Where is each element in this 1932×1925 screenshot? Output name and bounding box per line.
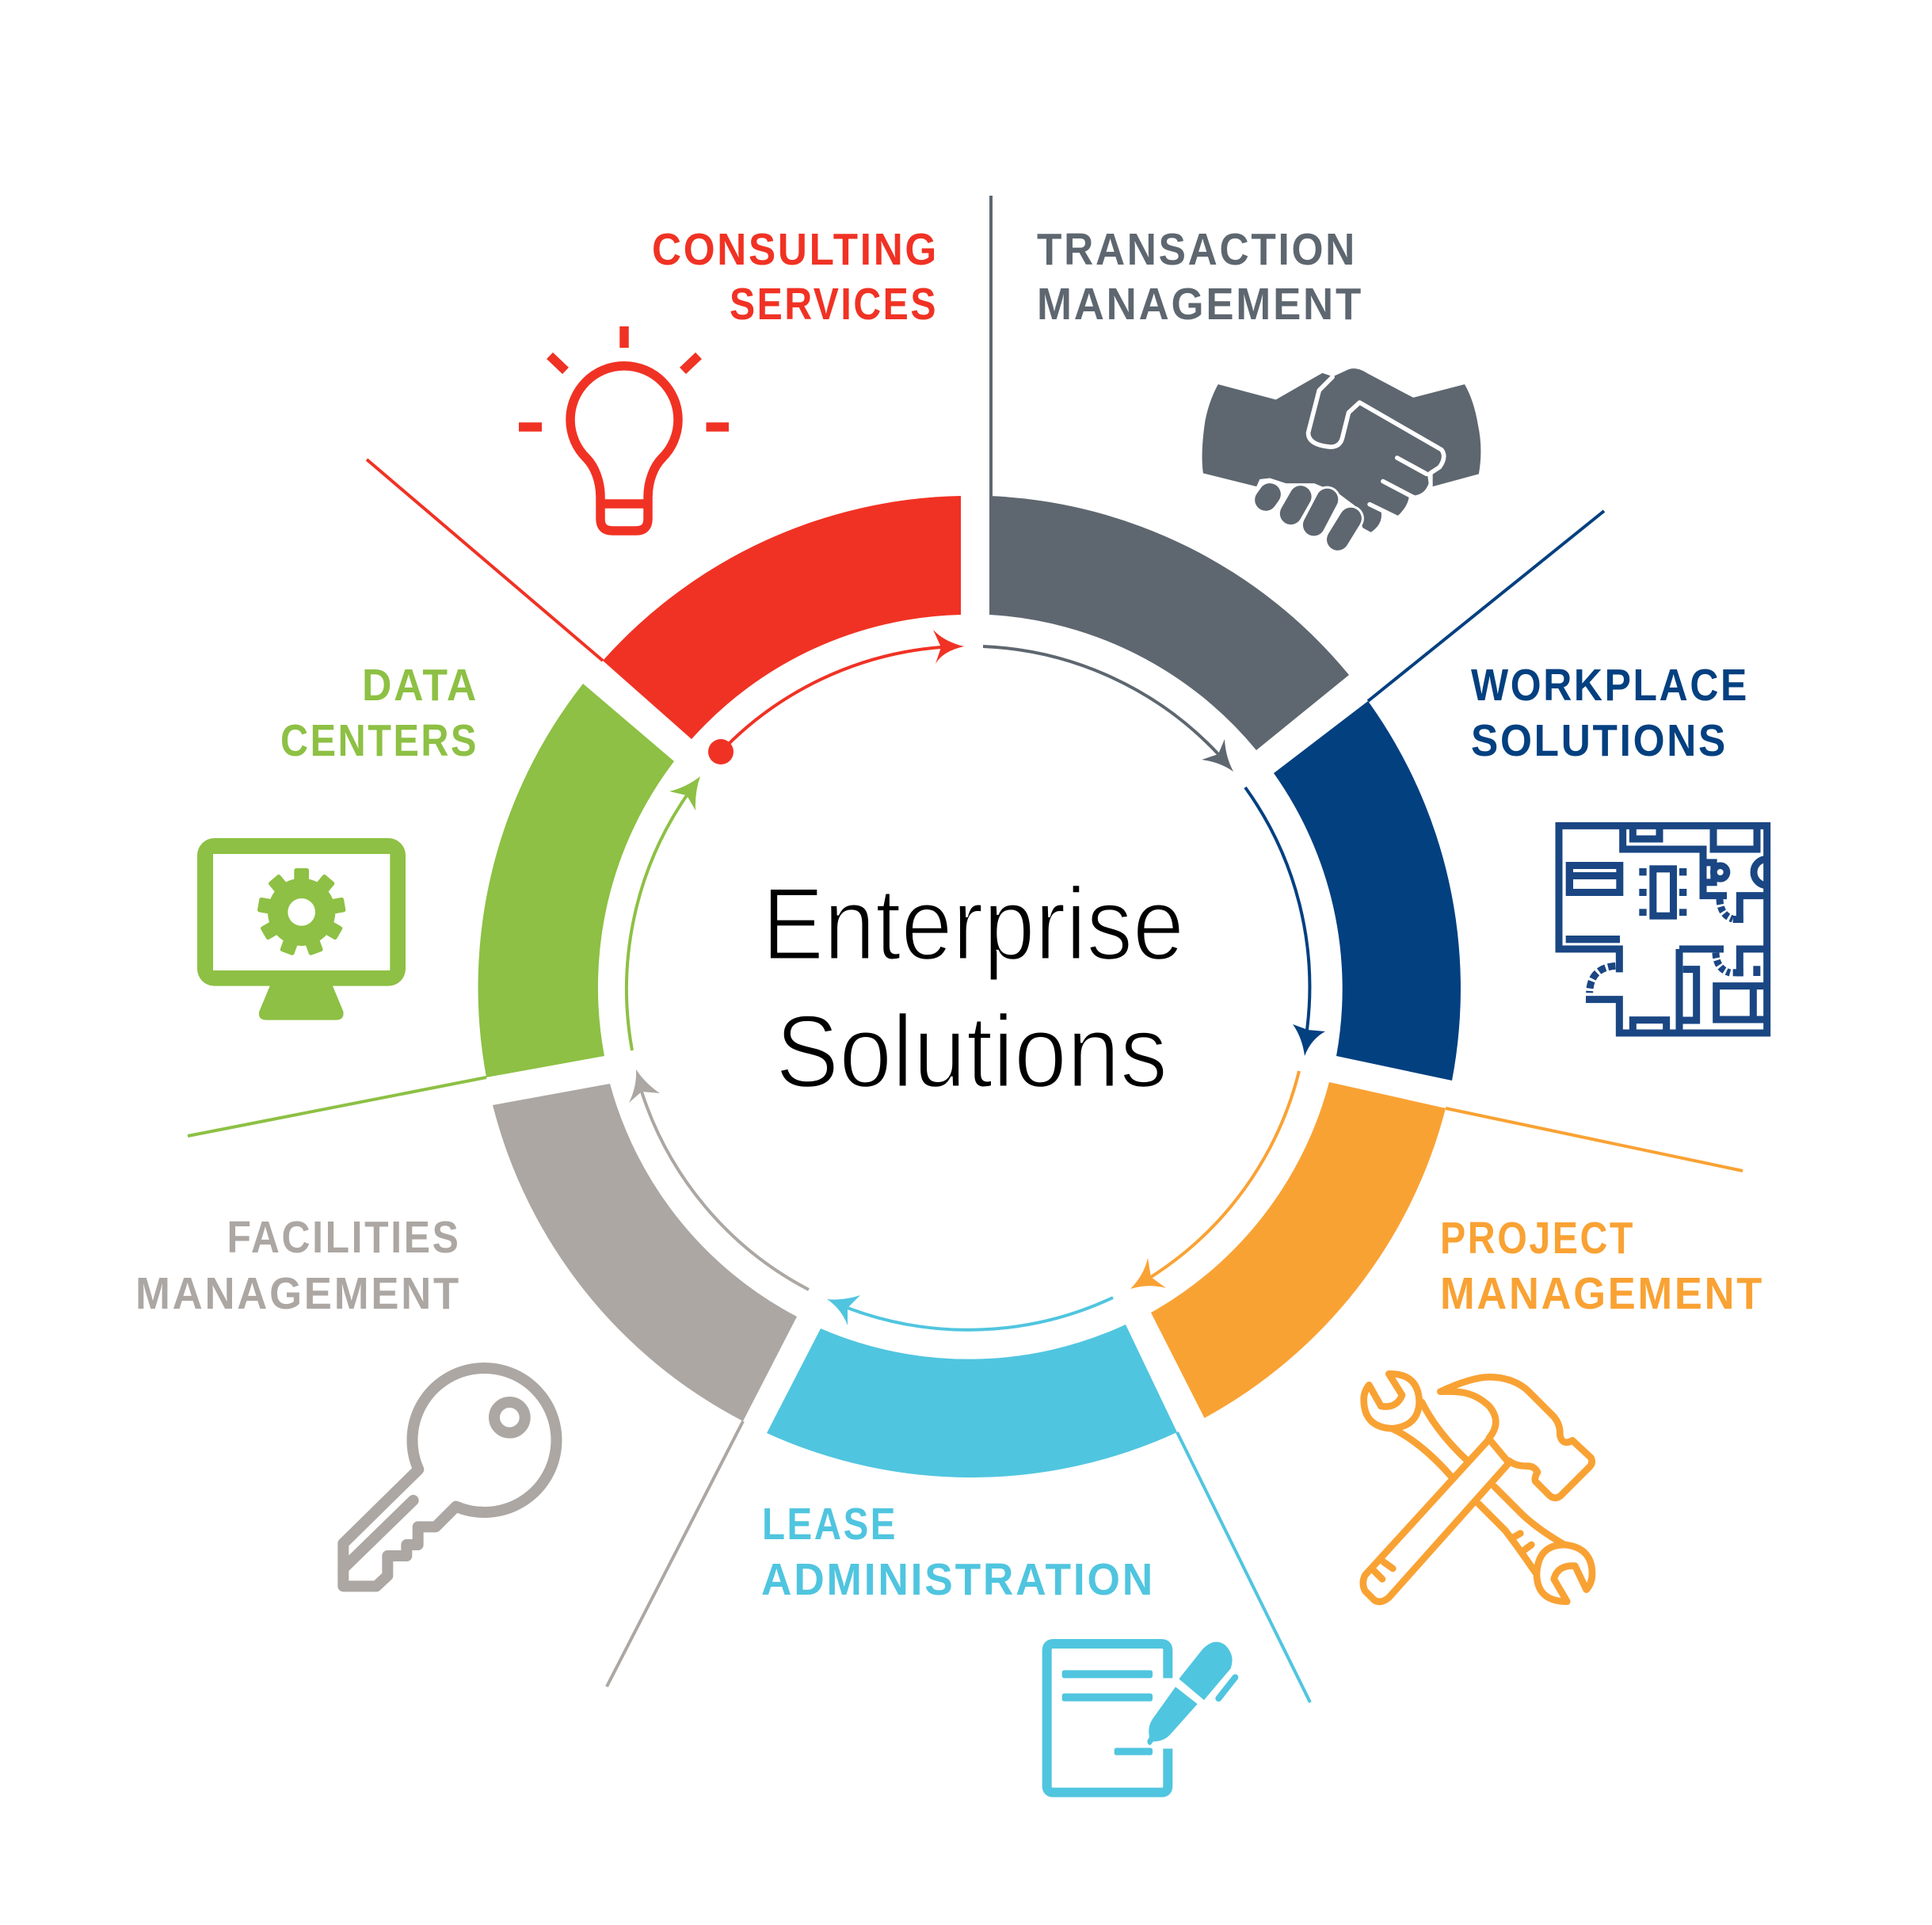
label: project management: PROJECT bbox=[1440, 1213, 1635, 1264]
icon: handshake bbox=[1202, 368, 1480, 539]
label: project management bbox=[1440, 1213, 1764, 1319]
label: consulting services: SERVICES bbox=[730, 279, 938, 330]
ring segment: facilities management bbox=[493, 1084, 797, 1687]
ring segment: workplace solutions bbox=[1274, 511, 1604, 1081]
arrow: workplace to project bbox=[1245, 787, 1325, 1056]
arrow: lease to facilities bbox=[827, 1295, 1113, 1330]
icon: monitor with gear bbox=[197, 838, 406, 1020]
ring segment: consulting services bbox=[367, 459, 961, 739]
center title: Solutions bbox=[775, 993, 1168, 1109]
label: transaction management: TRANSACTION bbox=[1037, 224, 1357, 275]
icon: light bulb bbox=[519, 326, 729, 531]
label: facilities management: FACILITIES bbox=[227, 1212, 461, 1263]
arrow: project to lease bbox=[1130, 1071, 1299, 1289]
icon: document and pen bbox=[1047, 1642, 1235, 1793]
arrow: consulting to transaction bbox=[708, 630, 964, 764]
label: facilities management bbox=[135, 1212, 461, 1319]
center title bbox=[762, 866, 1184, 1109]
label: lease administration: LEASE bbox=[762, 1499, 897, 1550]
arrow: data centers to consulting bbox=[627, 776, 700, 1050]
label: consulting services: CONSULTING bbox=[652, 224, 939, 275]
label: lease administration bbox=[761, 1499, 1155, 1605]
label: workplace solutions: SOLUTIONS bbox=[1471, 715, 1728, 766]
label: facilities management: MANAGEMENT bbox=[135, 1268, 461, 1319]
label: lease administration: ADMINISTRATION bbox=[761, 1554, 1155, 1605]
icon: key bbox=[343, 1368, 556, 1586]
label: data centers bbox=[280, 660, 478, 766]
label: workplace solutions bbox=[1471, 660, 1749, 766]
center title: Enterprise bbox=[762, 866, 1184, 982]
label: workplace solutions: WORKPLACE bbox=[1471, 660, 1749, 711]
label: data centers: DATA bbox=[362, 660, 478, 711]
arrow: transaction to workplace bbox=[983, 646, 1233, 772]
label: consulting services bbox=[652, 224, 939, 330]
ring segment: data centers bbox=[188, 684, 674, 1136]
label: transaction management: MANAGEMENT bbox=[1037, 279, 1363, 330]
icon: floor plan bbox=[1559, 825, 1767, 1033]
ring segment: project management bbox=[1151, 1082, 1743, 1418]
label: project management: MANAGEMENT bbox=[1440, 1268, 1764, 1319]
label: data centers: CENTERS bbox=[280, 715, 478, 766]
ring segment: transaction management bbox=[989, 196, 1349, 750]
label: transaction management bbox=[1037, 224, 1363, 330]
arrow: facilities to data centers bbox=[629, 1069, 809, 1290]
icon: hammer and wrench bbox=[1363, 1374, 1592, 1602]
ring segment: lease administration bbox=[767, 1325, 1310, 1702]
